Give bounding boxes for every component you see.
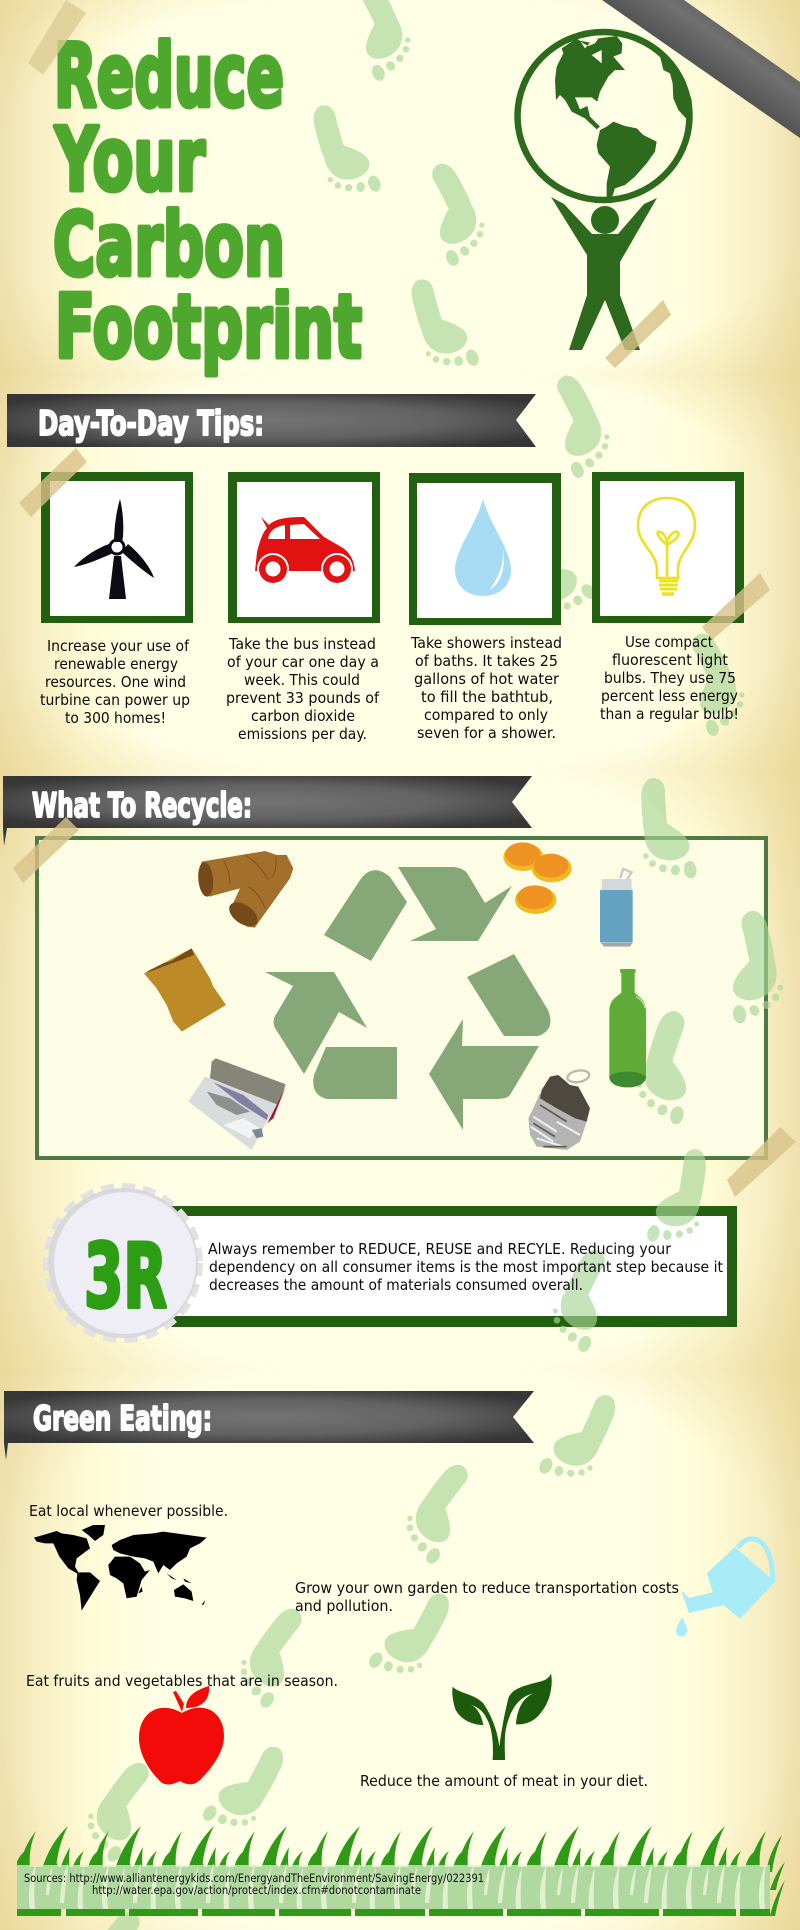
text block: shower tip — [410, 634, 562, 742]
text block: 3R message: decreases the amount of materials consumed overall. — [209, 1276, 583, 1294]
text block: shower tip: gallons of hot water — [414, 670, 560, 688]
text block: bus tip: Take the bus instead — [228, 635, 376, 653]
text block: bus tip: carbon dioxide — [251, 707, 355, 725]
text: grow your own — [295, 1579, 679, 1615]
text block: wind tip: to 300 homes! — [65, 709, 166, 727]
icon: light bulb — [638, 498, 695, 594]
text block: shower tip: seven for a shower. — [417, 724, 556, 742]
panel: what to recycle — [37, 776, 800, 1158]
icon: sprout — [452, 1673, 552, 1760]
tape: tips left — [19, 448, 87, 517]
text block: bus tip: of your car one day a — [227, 653, 379, 671]
text block: 3R message — [208, 1240, 723, 1294]
title: Reduce — [54, 25, 284, 127]
footprints across the panel — [615, 776, 800, 1130]
text block: bus tip — [226, 635, 380, 743]
text block: wind tip: Increase your use of — [47, 637, 190, 655]
panel: sources: Sources: http://www.alliantenergykids.com/EnergyandTheEnvironment/SavingEnergy/022391 — [24, 1871, 484, 1885]
text block: bus tip: week. This could — [244, 671, 360, 689]
icon: wind turbine — [74, 499, 154, 599]
text block: shower tip: compared to only — [424, 706, 548, 724]
icon: bottle cap 3R — [47, 1187, 199, 1339]
text block: wind tip: renewable energy — [54, 655, 178, 673]
text: reduce meat: Reduce the amount of meat in your diet. — [360, 1772, 648, 1790]
panel: wind turbine — [41, 472, 193, 623]
text block: bulb tip: fluorescent light — [612, 651, 728, 669]
panel: sources — [17, 1865, 770, 1909]
text block: bulb tip: percent less energy — [601, 687, 738, 705]
panel: water drop — [409, 473, 561, 625]
title — [53, 25, 362, 378]
title: Your — [54, 109, 205, 211]
text block: wind tip — [40, 637, 190, 727]
icon: bottle caps — [503, 842, 572, 914]
icon: crushed can — [528, 1069, 590, 1150]
text: grow your own: and pollution. — [295, 1597, 393, 1615]
panel: car — [228, 472, 380, 623]
icon: water drop — [455, 499, 511, 596]
icon: apple — [139, 1686, 224, 1784]
text: eat local: Eat local whenever possible. — [29, 1502, 228, 1520]
icon: recycling arrows — [265, 867, 550, 1130]
tape: person — [605, 300, 671, 368]
icon: cardboard tubes — [197, 851, 293, 931]
icon: world map — [34, 1525, 207, 1611]
text block: shower tip: of baths. It takes 25 — [415, 652, 558, 670]
banner: Day-To-Day Tips — [7, 394, 536, 447]
panel: 3R callout — [47, 1148, 737, 1357]
icon: paper bag — [144, 948, 226, 1032]
tape: tips right — [702, 573, 770, 640]
panel: light bulb — [592, 472, 744, 623]
icon: watering can — [676, 1539, 775, 1636]
text block: bulb tip: Use compact — [625, 633, 713, 651]
text block: wind tip: resources. One wind — [45, 673, 186, 691]
icon: bottle cap 3R: 3R — [84, 1225, 167, 1328]
text block: 3R message: Always remember to REDUCE, REUSE and RECYLE. Reducing your — [208, 1240, 672, 1258]
title: Footprint — [55, 276, 362, 378]
text block: bulb tip: than a regular bulb! — [600, 705, 739, 723]
tape: recycle left — [13, 817, 79, 883]
grass — [15, 1826, 800, 1916]
icon: aluminium foil — [188, 1058, 286, 1150]
text block: shower tip: to fill the bathtub, — [421, 688, 553, 706]
banner: What To Recycle — [3, 776, 532, 846]
corner ribbon — [602, 0, 800, 138]
banner: Green Eating: Green Eating: — [33, 1399, 212, 1439]
icon: person holding globe — [518, 32, 693, 350]
text block: bus tip: emissions per day. — [238, 725, 367, 743]
text block: shower tip: Take showers instead — [410, 634, 562, 652]
banner: Day-To-Day Tips: Day-To-Day Tips: — [38, 404, 264, 444]
text: grow your own: Grow your own garden to reduce transportation costs — [295, 1579, 679, 1597]
banner: Green Eating — [4, 1391, 534, 1460]
text block: wind tip: turbine can power up — [40, 691, 190, 709]
icon: green bottle — [609, 969, 646, 1087]
banner: What To Recycle: What To Recycle: — [32, 786, 252, 826]
panel: sources: http://water.epa.gov/action/protect/index.cfm#donotcontaminate — [92, 1883, 421, 1897]
text block: 3R message: dependency on all consumer items is the most important step because it — [209, 1258, 723, 1276]
icon: soda can — [600, 869, 633, 947]
text block: bulb tip — [600, 633, 739, 723]
text block: bus tip: prevent 33 pounds of — [226, 689, 380, 707]
tape: title — [28, 0, 86, 75]
footprints seen across the panel — [533, 1148, 715, 1357]
text: seasonal: Eat fruits and vegetables that are in season. — [26, 1672, 338, 1690]
text block: bulb tip: bulbs. They use 75 — [604, 669, 736, 687]
icon: red car — [255, 517, 355, 585]
title: Carbon — [53, 194, 285, 296]
tape: recycle right — [727, 1127, 796, 1197]
